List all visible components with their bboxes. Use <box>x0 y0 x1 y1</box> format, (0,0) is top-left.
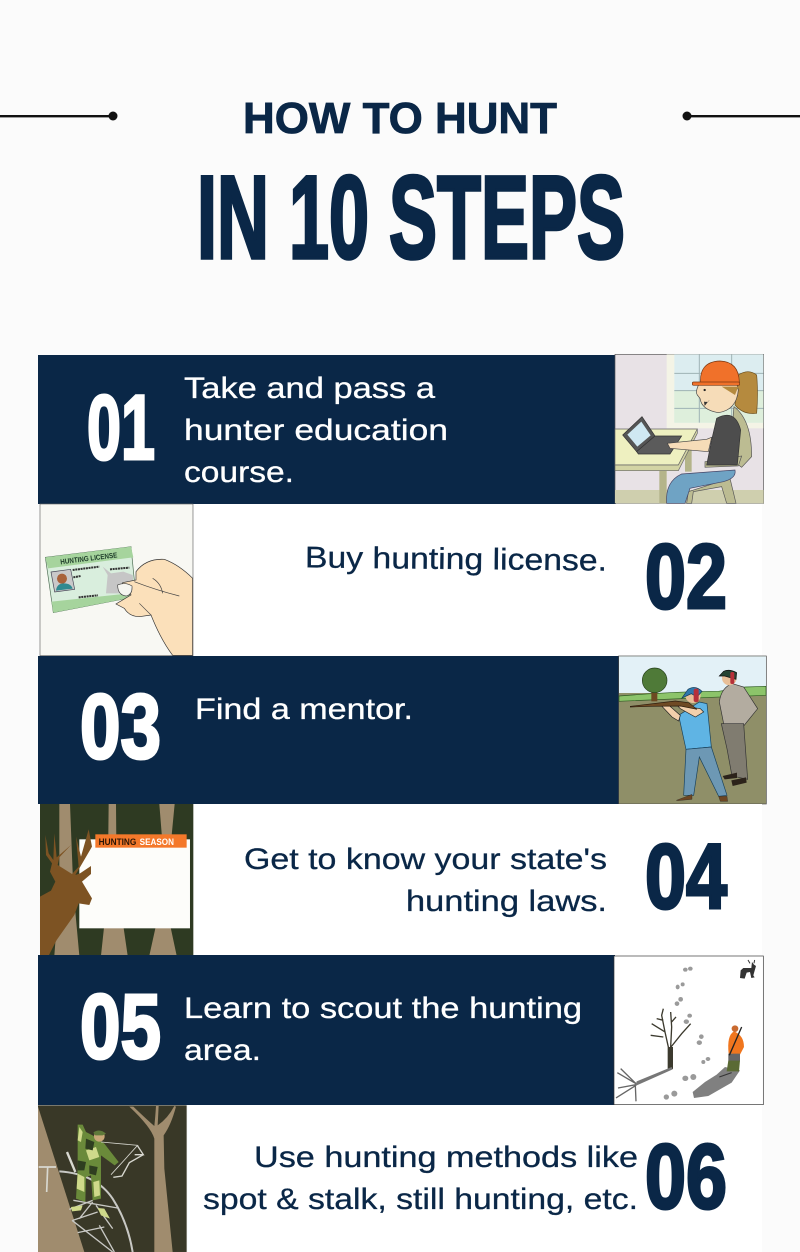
number 05: 05 <box>80 976 161 1078</box>
panel: step 02 <box>40 504 762 656</box>
band 05 <box>38 955 615 1105</box>
text 01: course. <box>184 456 294 489</box>
text 03: Find a mentor. <box>195 693 413 726</box>
text 06 <box>203 1141 638 1216</box>
right title ornament <box>682 112 800 120</box>
number 01: 01 <box>87 377 155 479</box>
number 03: 03 <box>80 676 161 778</box>
text 04 <box>244 843 607 918</box>
text 04: Get to know your state's <box>244 843 607 876</box>
illustration: hunting season board: HUNTING <box>99 837 136 847</box>
white band 06 <box>188 1105 762 1252</box>
illustration: hunting season board <box>40 804 193 956</box>
white band 02 <box>193 504 762 656</box>
panel: step 04 <box>40 804 762 956</box>
band 03 <box>38 656 620 804</box>
illustration: mentor and shooter <box>619 656 766 804</box>
illustration: license in hand: HUNTING LICENSE <box>60 550 118 566</box>
text 06: Use hunting methods like <box>254 1141 638 1174</box>
text 05: Learn to scout the hunting <box>184 992 582 1025</box>
illustration: bow hunter in tree stand <box>38 1105 187 1252</box>
text 05: area. <box>184 1034 261 1067</box>
deer tracks <box>664 967 710 1100</box>
number 02: 02 <box>645 526 727 628</box>
number 04: 04 <box>645 826 727 928</box>
text 01: hunter education <box>184 414 448 447</box>
number 06: 06 <box>645 1126 727 1228</box>
text 06: spot & stalk, still hunting, etc. <box>203 1183 638 1216</box>
text 04: hunting laws. <box>406 885 607 918</box>
text 02: Buy hunting license. <box>305 541 607 578</box>
panel: step 06 <box>38 1105 762 1252</box>
panel: step 03 <box>38 656 766 804</box>
left title ornament <box>0 112 118 120</box>
illustration: hunting season board: SEASON <box>140 837 174 847</box>
panel: step 05 <box>38 955 763 1105</box>
illustration: student at laptop <box>615 354 764 503</box>
band 01 <box>38 355 616 504</box>
title: how to hunt: HOW TO HUNT <box>243 94 557 143</box>
white band 04 <box>194 804 762 956</box>
text 05 <box>184 992 582 1067</box>
text 01: Take and pass a <box>184 372 435 405</box>
illustration: license in hand <box>40 504 193 656</box>
text 01 <box>184 372 448 489</box>
panel: step 01 <box>38 354 764 504</box>
illustration: scouting tracks <box>614 956 763 1105</box>
